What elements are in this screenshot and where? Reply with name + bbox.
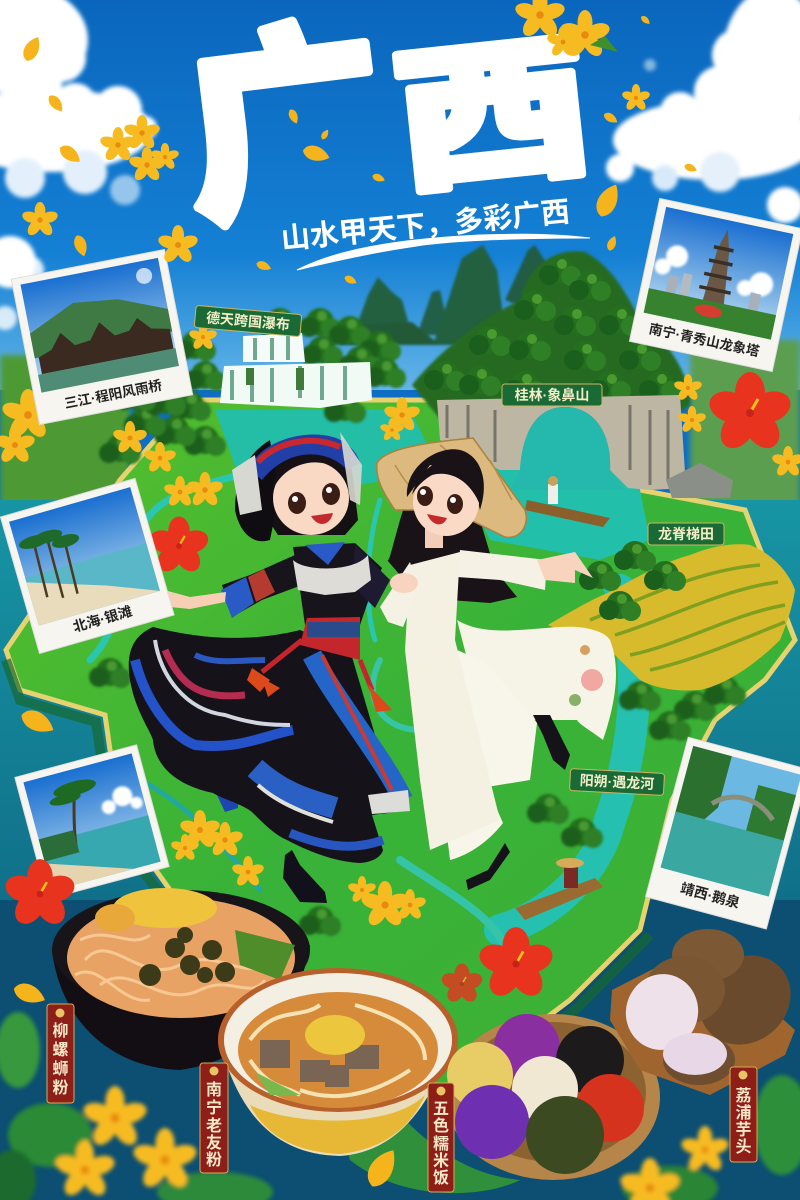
caption: 三江·程阳风雨桥 <box>63 377 164 411</box>
clouds: top right <box>606 0 800 223</box>
tag: 五色糯米饭: 糯 <box>433 1135 449 1153</box>
forests on map <box>89 308 746 936</box>
tag: 南宁老友粉: 老 <box>206 1117 222 1135</box>
fringe <box>272 450 352 490</box>
large left flowers on map <box>0 389 56 465</box>
label: 龙脊梯田: 龙脊梯田 <box>658 526 714 542</box>
upper lake and river network <box>90 410 650 960</box>
skirt <box>129 627 410 863</box>
elephant trunk hill <box>412 251 690 490</box>
foreground petal <box>362 1144 402 1191</box>
sleeve cuff <box>221 577 254 618</box>
tag: 南宁老友粉: 友 <box>206 1134 222 1152</box>
tag: 荔浦芋头: 芋 <box>735 1120 752 1139</box>
tag: 荔浦芋头 <box>730 1067 757 1162</box>
falling petals <box>11 14 698 1008</box>
brush underline <box>297 234 590 270</box>
osmanthus flowers: top centre <box>513 0 618 60</box>
headwrap <box>235 440 278 541</box>
silver skirt fringe <box>368 790 410 814</box>
flared gown <box>457 620 616 740</box>
label: 阳朔·遇龙河 <box>569 769 665 795</box>
tag: 南宁老友粉: 宁 <box>206 1098 222 1117</box>
tag: 荔浦芋头: 头 <box>735 1138 752 1156</box>
caption: 靖西·鹅泉 <box>679 880 741 911</box>
eyes and mouth <box>417 486 463 524</box>
long hair behind <box>387 490 517 603</box>
shoes and legs <box>217 772 327 903</box>
photo card: 北海·银滩 <box>0 478 174 654</box>
karst mountains <box>340 245 558 345</box>
water dark foreground <box>0 900 800 1200</box>
photo card: 南宁·青秀山龙象塔 <box>629 198 800 372</box>
tag: 五色糯米饭: 饭 <box>433 1169 449 1187</box>
osmanthus flowers on the map <box>112 323 800 929</box>
label: 德天跨国瀑布 <box>194 305 302 337</box>
label: 桂林·象鼻山 <box>502 384 602 406</box>
Guangxi map land <box>6 400 795 1090</box>
label: 桂林·象鼻山: 桂林·象鼻山 <box>515 387 589 403</box>
left character: minority dress girl <box>129 432 410 903</box>
hibiscus: upper right <box>705 372 795 455</box>
photo <box>661 746 800 897</box>
hands <box>390 552 593 593</box>
food: luosifen bowl <box>52 888 310 1070</box>
trousers <box>437 650 537 860</box>
hand left <box>153 587 226 609</box>
silver necklace <box>293 555 371 595</box>
tag: 南宁老友粉: 南 <box>206 1081 222 1099</box>
tag: 五色糯米饭: 色 <box>433 1116 449 1135</box>
food: laoyou noodle bowl <box>218 968 458 1156</box>
torso <box>293 543 382 625</box>
sky background <box>0 0 800 390</box>
gown floral print <box>419 645 603 809</box>
tag: 柳螺蛳粉: 蛳 <box>52 1060 69 1078</box>
label: 阳朔·遇龙河: 阳朔·遇龙河 <box>579 772 655 792</box>
skirt embroidery <box>135 640 403 846</box>
leafy base under food <box>300 1010 520 1193</box>
shoes <box>466 715 570 890</box>
water background <box>0 500 800 1200</box>
photo card: 靖西·鹅泉 <box>646 737 800 929</box>
photo <box>9 487 160 626</box>
subtitle: 山水甲天下，多彩广西 <box>280 195 571 256</box>
neck <box>425 528 443 548</box>
photo card: beach <box>15 745 169 899</box>
title character: 广: 广 <box>172 4 398 250</box>
photo card: 三江·程阳风雨桥 <box>11 249 193 425</box>
eyes and mouth <box>288 483 340 524</box>
food: five-colour rice basket <box>446 1014 660 1180</box>
caption: 北海·银滩 <box>71 603 134 635</box>
tag: 五色糯米饭 <box>428 1083 454 1192</box>
sleeve left <box>380 562 418 627</box>
face <box>413 468 479 536</box>
hibiscus: left <box>147 516 211 576</box>
headdress <box>232 432 362 515</box>
fringe <box>412 459 480 505</box>
tag: 柳螺蛳粉 <box>47 1004 74 1103</box>
photo <box>644 207 793 340</box>
hair <box>265 447 358 535</box>
map edge shade <box>6 660 650 1100</box>
title character: 西: 西 <box>387 21 598 212</box>
foreground foliage: bottom left <box>0 1012 273 1200</box>
distant foliage: left and right edges <box>0 340 800 530</box>
hair top <box>407 449 484 510</box>
collar <box>305 542 345 565</box>
tag: 柳螺蛳粉: 柳 <box>52 1022 69 1040</box>
face <box>273 461 349 535</box>
tag: 柳螺蛳粉: 粉 <box>52 1079 69 1097</box>
foreground foliage: bottom right <box>618 1075 800 1200</box>
label: 德天跨国瀑布: 德天跨国瀑布 <box>205 309 291 333</box>
osmanthus flowers: top left <box>21 84 651 265</box>
hibiscus and blossoms near bowl <box>2 859 556 1005</box>
waterfall scenery <box>220 333 372 408</box>
rice terraces <box>548 463 795 691</box>
tag: 南宁老友粉 <box>200 1063 228 1173</box>
bamboo raft: lower river <box>515 858 603 920</box>
red waist sash <box>247 617 392 712</box>
tag: 南宁老友粉: 粉 <box>206 1151 222 1169</box>
bamboo raft: upper river <box>525 476 610 527</box>
sleeve left <box>222 555 302 617</box>
tag: 荔浦芋头: 浦 <box>735 1103 752 1122</box>
conical hat <box>377 438 526 537</box>
tag: 荔浦芋头: 荔 <box>735 1087 752 1105</box>
photo <box>23 753 161 891</box>
title <box>172 4 598 250</box>
caption: 南宁·青秀山龙象塔 <box>648 320 762 359</box>
food: taro on wooden board <box>610 929 800 1095</box>
tag: 柳螺蛳粉: 螺 <box>52 1041 69 1059</box>
photo <box>21 258 179 393</box>
tag: 五色糯米饭: 五 <box>433 1101 449 1118</box>
clouds: top left <box>0 0 157 330</box>
sleeve right <box>457 550 547 590</box>
tag: 五色糯米饭: 米 <box>433 1152 449 1170</box>
label: 龙脊梯田 <box>648 523 724 545</box>
arm right <box>352 545 390 608</box>
right character: ao dai girl <box>377 438 616 890</box>
gown front panel <box>405 552 500 850</box>
